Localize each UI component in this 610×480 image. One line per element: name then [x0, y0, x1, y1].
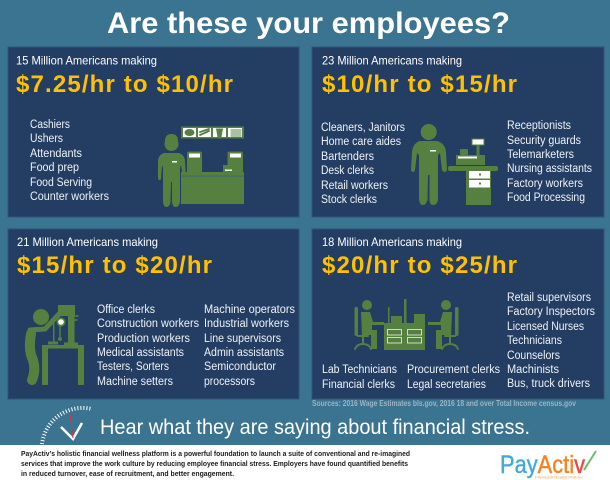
- job list: Counter workers: [30, 191, 109, 203]
- job list: column one: Office clerks: [97, 304, 155, 316]
- job list: column two: Admin assistants: [204, 347, 284, 359]
- job list: column one: Machine setters: [97, 376, 173, 388]
- job list: Cashiers: [30, 119, 70, 131]
- job list: Attendants: [30, 148, 82, 160]
- job list: right: Nursing assistants: [507, 163, 592, 175]
- footer text: services that improve the work culture by reducing employee financial stress. Employers have found quantified benefits: [21, 459, 408, 468]
- wage range: $20/hr to $25/hr: [322, 252, 517, 279]
- job list: right: [507, 292, 595, 390]
- job list: column one: [97, 304, 199, 388]
- job list: column two: Machine operators: [204, 304, 295, 316]
- panel: $15 to $20: [8, 229, 299, 399]
- call to action: Hear what they are saying about financial stress.: [100, 415, 530, 439]
- panel heading: 15 Million Americans making: [16, 54, 157, 68]
- job list: left: Cleaners, Janitors: [321, 122, 405, 134]
- job list: right: [507, 120, 592, 204]
- job list: bottom left: [322, 364, 500, 391]
- job list: column one: Production workers: [97, 333, 190, 345]
- job list: [30, 119, 109, 203]
- wage range: $10/hr to $15/hr: [322, 71, 517, 98]
- job list: right: Technicians: [507, 335, 562, 347]
- logo: PayActiv: Financial Health Partner: [535, 476, 584, 480]
- job list: right: Bus, truck drivers: [507, 378, 590, 390]
- icon: gauge: [42, 408, 92, 444]
- icon: counter worker: [158, 126, 244, 207]
- job list: bottom left: Lab Technicians: [322, 364, 397, 376]
- job list: column one: Testers, Sorters: [97, 361, 169, 373]
- job list: right: Telemarketers: [507, 149, 574, 161]
- job list: right: Factory workers: [507, 178, 583, 190]
- panel heading: 18 Million Americans making: [322, 235, 462, 249]
- job list: Food Serving: [30, 177, 92, 189]
- title: Are these your employees?: [107, 7, 510, 40]
- job list: right: Receptionists: [507, 120, 571, 132]
- job list: left: Retail workers: [321, 180, 388, 192]
- job list: right: Security guards: [507, 135, 581, 147]
- wage range: $15/hr to $20/hr: [17, 252, 212, 279]
- footer text: PayActiv’s holistic financial wellness platform is a powerful foundation to launch a suite of conventional and re-imagined: [21, 449, 410, 458]
- job list: right: Machinists: [507, 364, 559, 376]
- job list: right: Licensed Nurses: [507, 321, 584, 333]
- panel heading: 23 Million Americans making: [322, 54, 462, 68]
- job list: left: Desk clerks: [321, 165, 374, 177]
- icon: machine operator: [30, 305, 84, 385]
- job list: column one: Construction workers: [97, 318, 199, 330]
- panel: $20 to $25: [312, 229, 604, 399]
- job list: right: Factory Inspectors: [507, 306, 595, 318]
- panel heading: 21 Million Americans making: [17, 235, 158, 249]
- footer text: [21, 449, 410, 478]
- wage range: $7.25/hr to $10/hr: [16, 71, 233, 98]
- job list: column two: Semiconductor: [204, 361, 276, 373]
- icon: retail clerk: [411, 124, 498, 205]
- job list: left: Stock clerks: [321, 194, 377, 206]
- footer band: [0, 445, 610, 480]
- footer text: in reduced turnover, ease of recruitment, and better engagement.: [21, 469, 234, 478]
- job list: column one: Medical assistants: [97, 347, 184, 359]
- logo: PayActiv: PayActiv: [500, 451, 585, 479]
- job list: column two: [204, 304, 295, 388]
- job list: left: [321, 122, 405, 206]
- job list: left: Bartenders: [321, 151, 374, 163]
- job list: bottom left: Procurement clerks: [407, 364, 500, 376]
- job list: right: Counselors: [507, 350, 560, 362]
- job list: Food prep: [30, 162, 79, 174]
- job list: column two: processors: [204, 376, 255, 388]
- job list: bottom left: Financial clerks: [322, 379, 395, 391]
- job list: column two: Line supervisors: [204, 333, 281, 345]
- job list: right: Retail supervisors: [507, 292, 591, 304]
- panel: $7.25 to $10: [8, 47, 299, 217]
- job list: bottom left: Legal secretaries: [407, 379, 486, 391]
- icon: office desk workers: [354, 299, 458, 350]
- job list: left: Home care aides: [321, 136, 401, 148]
- job list: Ushers: [30, 133, 63, 145]
- job list: column two: Industrial workers: [204, 318, 289, 330]
- panel: $10 to $15: [312, 47, 604, 217]
- job list: right: Food Processing: [507, 192, 585, 204]
